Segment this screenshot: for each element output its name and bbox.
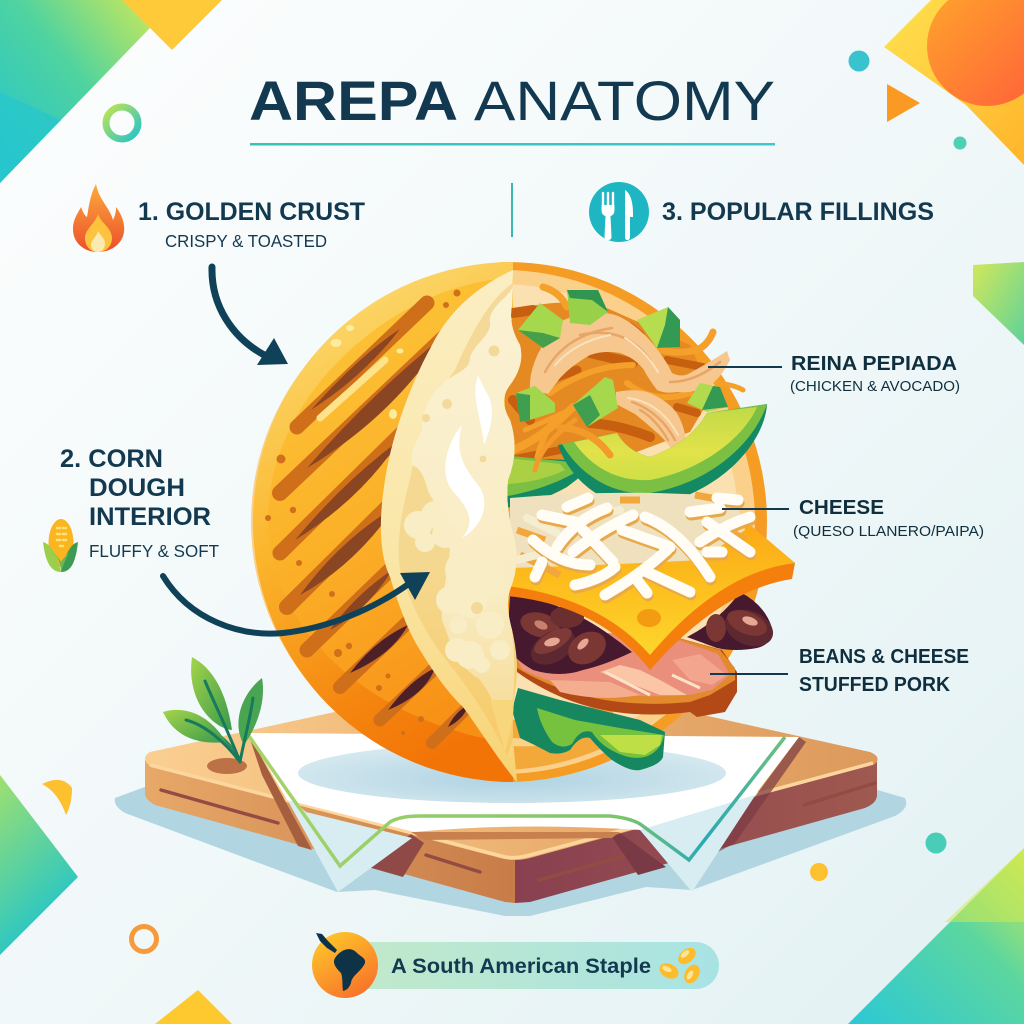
icon: flame — [73, 184, 124, 252]
icon: south america map — [316, 933, 365, 991]
board grooves — [161, 783, 875, 880]
board hole — [207, 758, 247, 774]
label: beans and pork — [799, 645, 969, 696]
label: cheese: (QUESO LLANERO/PAIPA) — [793, 524, 984, 540]
footer pill — [345, 942, 719, 989]
footer badge — [312, 932, 719, 998]
title: ANATOMY — [474, 69, 775, 132]
label: corn dough interior: DOUGH — [89, 474, 185, 502]
label: golden crust: CRISPY & TOASTED — [165, 231, 327, 251]
label: corn dough interior: FLUFFY & SOFT — [89, 541, 219, 561]
dough white swirls — [475, 376, 492, 445]
corn dough interior — [381, 270, 521, 782]
arepa left grilled half — [253, 262, 513, 782]
label: popular fillings: 3. POPULAR FILLINGS — [662, 198, 934, 226]
label: golden crust — [138, 198, 365, 251]
board left side — [145, 760, 515, 903]
napkin pale folds — [282, 788, 760, 892]
decorative shape: right edge — [973, 262, 1024, 345]
board highlight — [150, 763, 873, 858]
arrow: to corn dough — [163, 572, 430, 634]
beans — [507, 592, 779, 674]
title — [249, 69, 775, 132]
avocado slices — [502, 404, 767, 508]
label: corn dough interior — [60, 445, 219, 561]
label: cheese: CHEESE — [799, 496, 884, 519]
dough lumps — [404, 501, 510, 673]
decorative dots and rings — [42, 50, 966, 952]
board shadow — [115, 785, 906, 916]
board top — [145, 673, 878, 860]
cutting board with napkin — [115, 673, 906, 916]
plant sprig — [163, 657, 263, 762]
footer text: A South American Staple — [391, 955, 651, 978]
label: golden crust: 1. GOLDEN CRUST — [138, 198, 365, 226]
decorative corner: bottom right — [848, 848, 1024, 1024]
crust speckles — [265, 290, 460, 735]
label: reina pepiada: REINA PEPIADA — [791, 352, 957, 375]
leader lines — [708, 367, 789, 674]
label: corn dough interior: 2. CORN — [60, 445, 163, 473]
board right side — [515, 760, 877, 903]
napkin shadow on board — [248, 733, 806, 877]
grill marks — [280, 303, 470, 743]
carrot and chicken over avocado — [535, 420, 610, 470]
icon: corn kernels — [657, 945, 703, 986]
arepa — [251, 255, 795, 795]
dough air bubbles — [422, 346, 500, 614]
divider — [511, 183, 513, 237]
shredded white cheese — [510, 493, 751, 598]
avocado cubes — [516, 290, 728, 427]
cheese slice — [507, 525, 795, 670]
pork layer — [510, 630, 737, 717]
grill mark dark centres — [295, 329, 468, 727]
dough fluffy cream — [412, 285, 521, 720]
label: corn dough interior: INTERIOR — [89, 503, 211, 531]
decorative corner: bottom left — [0, 775, 78, 955]
decorative corner: top left — [0, 0, 222, 183]
title: AREPA — [249, 69, 458, 132]
label: reina pepiada: (CHICKEN & AVOCADO) — [790, 379, 960, 395]
dough inner shell — [399, 283, 521, 755]
label: cheese — [793, 496, 984, 540]
label: reina pepiada — [790, 352, 960, 395]
title underline — [250, 143, 775, 146]
label: beans and pork: STUFFED PORK — [799, 673, 950, 696]
arrow: to golden crust — [212, 267, 288, 365]
icon: corn — [43, 519, 78, 572]
label: beans and pork: BEANS & CHEESE — [799, 645, 969, 668]
decorative corner: top right — [884, 0, 1024, 165]
footer globe — [312, 932, 378, 998]
napkin inner line — [249, 736, 785, 866]
lettuce — [512, 688, 665, 770]
arepa right half back — [251, 255, 780, 795]
icon: fork and knife — [589, 182, 649, 242]
decorative triangle: bottom — [155, 990, 232, 1024]
napkin white top — [248, 733, 799, 832]
plate shadow — [298, 743, 726, 803]
shredded chicken and carrot — [503, 287, 743, 475]
dough outer shell — [381, 270, 521, 782]
